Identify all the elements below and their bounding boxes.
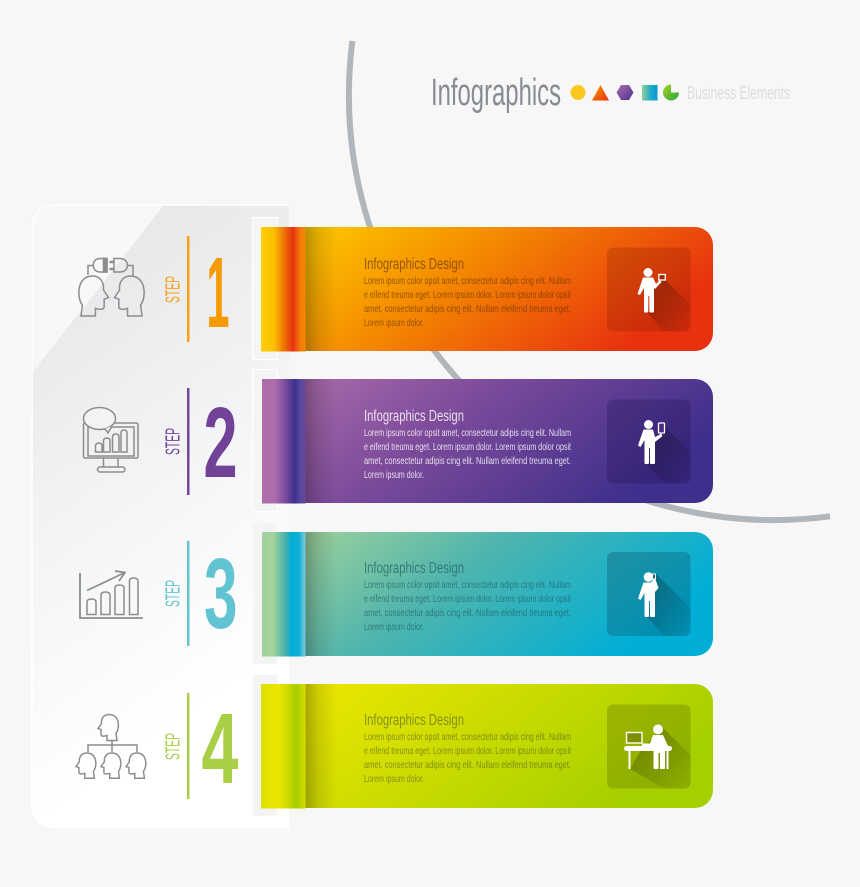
- icon: green pie: [663, 84, 679, 100]
- header: [431, 72, 790, 114]
- divider: [187, 236, 190, 342]
- text block: [364, 408, 571, 481]
- card: [305, 532, 713, 656]
- card: [305, 379, 713, 503]
- number: 2: [204, 387, 238, 499]
- text block: e eifend treuma eget. Lorem ipsum dolor. Lorem ipsum dolor opsit: [364, 745, 571, 757]
- roll: [261, 227, 306, 352]
- text block: Lorem ipsum dolor.: [364, 773, 424, 785]
- text block: Lorem ipsum dolor.: [364, 469, 424, 481]
- step label: STEP: [162, 428, 184, 455]
- divider: [187, 541, 190, 646]
- text block: amet, consectetur adipis cing elit. Nullam eleifend treuma eget.: [364, 303, 571, 315]
- roll tab backing: [252, 218, 278, 360]
- card: [305, 227, 713, 351]
- title: Infographics: [431, 72, 561, 114]
- roll: [261, 684, 306, 808]
- roll tab backing: [253, 675, 277, 816]
- card: [305, 684, 713, 808]
- step label: STEP: [162, 580, 184, 607]
- heading: Infographics Design: [364, 256, 464, 273]
- heading: Infographics Design: [364, 560, 464, 577]
- icon: purple hexagon: [616, 85, 634, 100]
- text block: e eifend treuma eget. Lorem ipsum dolor. Lorem ipsum dolor opsit: [364, 593, 571, 605]
- text block: Lorem ipsum dolor.: [364, 317, 424, 329]
- text block: e eifend treuma eget. Lorem ipsum dolor. Lorem ipsum dolor opsit: [364, 441, 571, 453]
- panel: left glass: [31, 205, 289, 828]
- number: 4: [202, 693, 239, 805]
- text block: [364, 256, 571, 329]
- text block: Lorem ipsum color opsit amet, consectetur adipis cing elit. Nullam: [364, 731, 571, 743]
- text block: e eifend treuma eget. Lorem ipsum dolor. Lorem ipsum dolor opsit: [364, 289, 571, 301]
- decorative arc: [349, 41, 830, 520]
- step 2: [84, 370, 713, 512]
- divider: [187, 388, 190, 495]
- text block: [364, 560, 571, 633]
- icon: team hierarchy: [76, 714, 146, 778]
- icon: monitor chat: [84, 408, 138, 472]
- icon tile: person with tablet: [607, 248, 690, 332]
- text block: amet, consectetur adipis cing elit. Nullam eleifend treuma eget.: [364, 607, 571, 619]
- step 1: [79, 218, 713, 360]
- icon: rising chart: [80, 571, 143, 618]
- heading: Infographics Design: [364, 712, 464, 729]
- icon: orange triangle: [592, 85, 609, 100]
- text block: Lorem ipsum color opsit amet, consectetur adipis cing elit. Nullam: [364, 427, 571, 439]
- step label: STEP: [162, 276, 184, 303]
- divider: [187, 693, 190, 799]
- icon: teal square: [642, 85, 658, 100]
- card shadow: [305, 227, 337, 351]
- roll: [262, 379, 306, 504]
- text block: amet, consectetur adipis cing elit. Nullam eleifend treuma eget.: [364, 759, 571, 771]
- icon tile: person on phone: [607, 552, 690, 636]
- card shadow: [305, 379, 337, 503]
- step 3: [80, 523, 713, 664]
- step 4: [76, 675, 713, 816]
- subtitle: Business Elements: [687, 83, 790, 103]
- card shadow: [305, 684, 337, 808]
- icon tile: person with phone: [607, 400, 690, 484]
- step label: STEP: [162, 733, 184, 760]
- icon: yellow circle: [570, 85, 586, 100]
- roll: [262, 532, 306, 656]
- roll tab backing: [252, 370, 278, 512]
- roll tab backing: [253, 523, 277, 664]
- text block: [364, 712, 571, 785]
- heading: Infographics Design: [364, 408, 464, 425]
- icon tile: person at desk: [607, 704, 690, 788]
- number: 3: [204, 538, 238, 650]
- text block: amet, consectetur adipis cing elit. Nullam eleifend treuma eget.: [364, 455, 571, 467]
- text block: Lorem ipsum color opsit amet, consectetur adipis cing elit. Nullam: [364, 275, 571, 287]
- icon: people plug: [79, 258, 144, 316]
- text block: Lorem ipsum color opsit amet, consectetur adipis cing elit. Nullam: [364, 579, 571, 591]
- step 1: 1: [206, 237, 230, 349]
- text block: Lorem ipsum dolor.: [364, 621, 424, 633]
- card shadow: [305, 532, 337, 656]
